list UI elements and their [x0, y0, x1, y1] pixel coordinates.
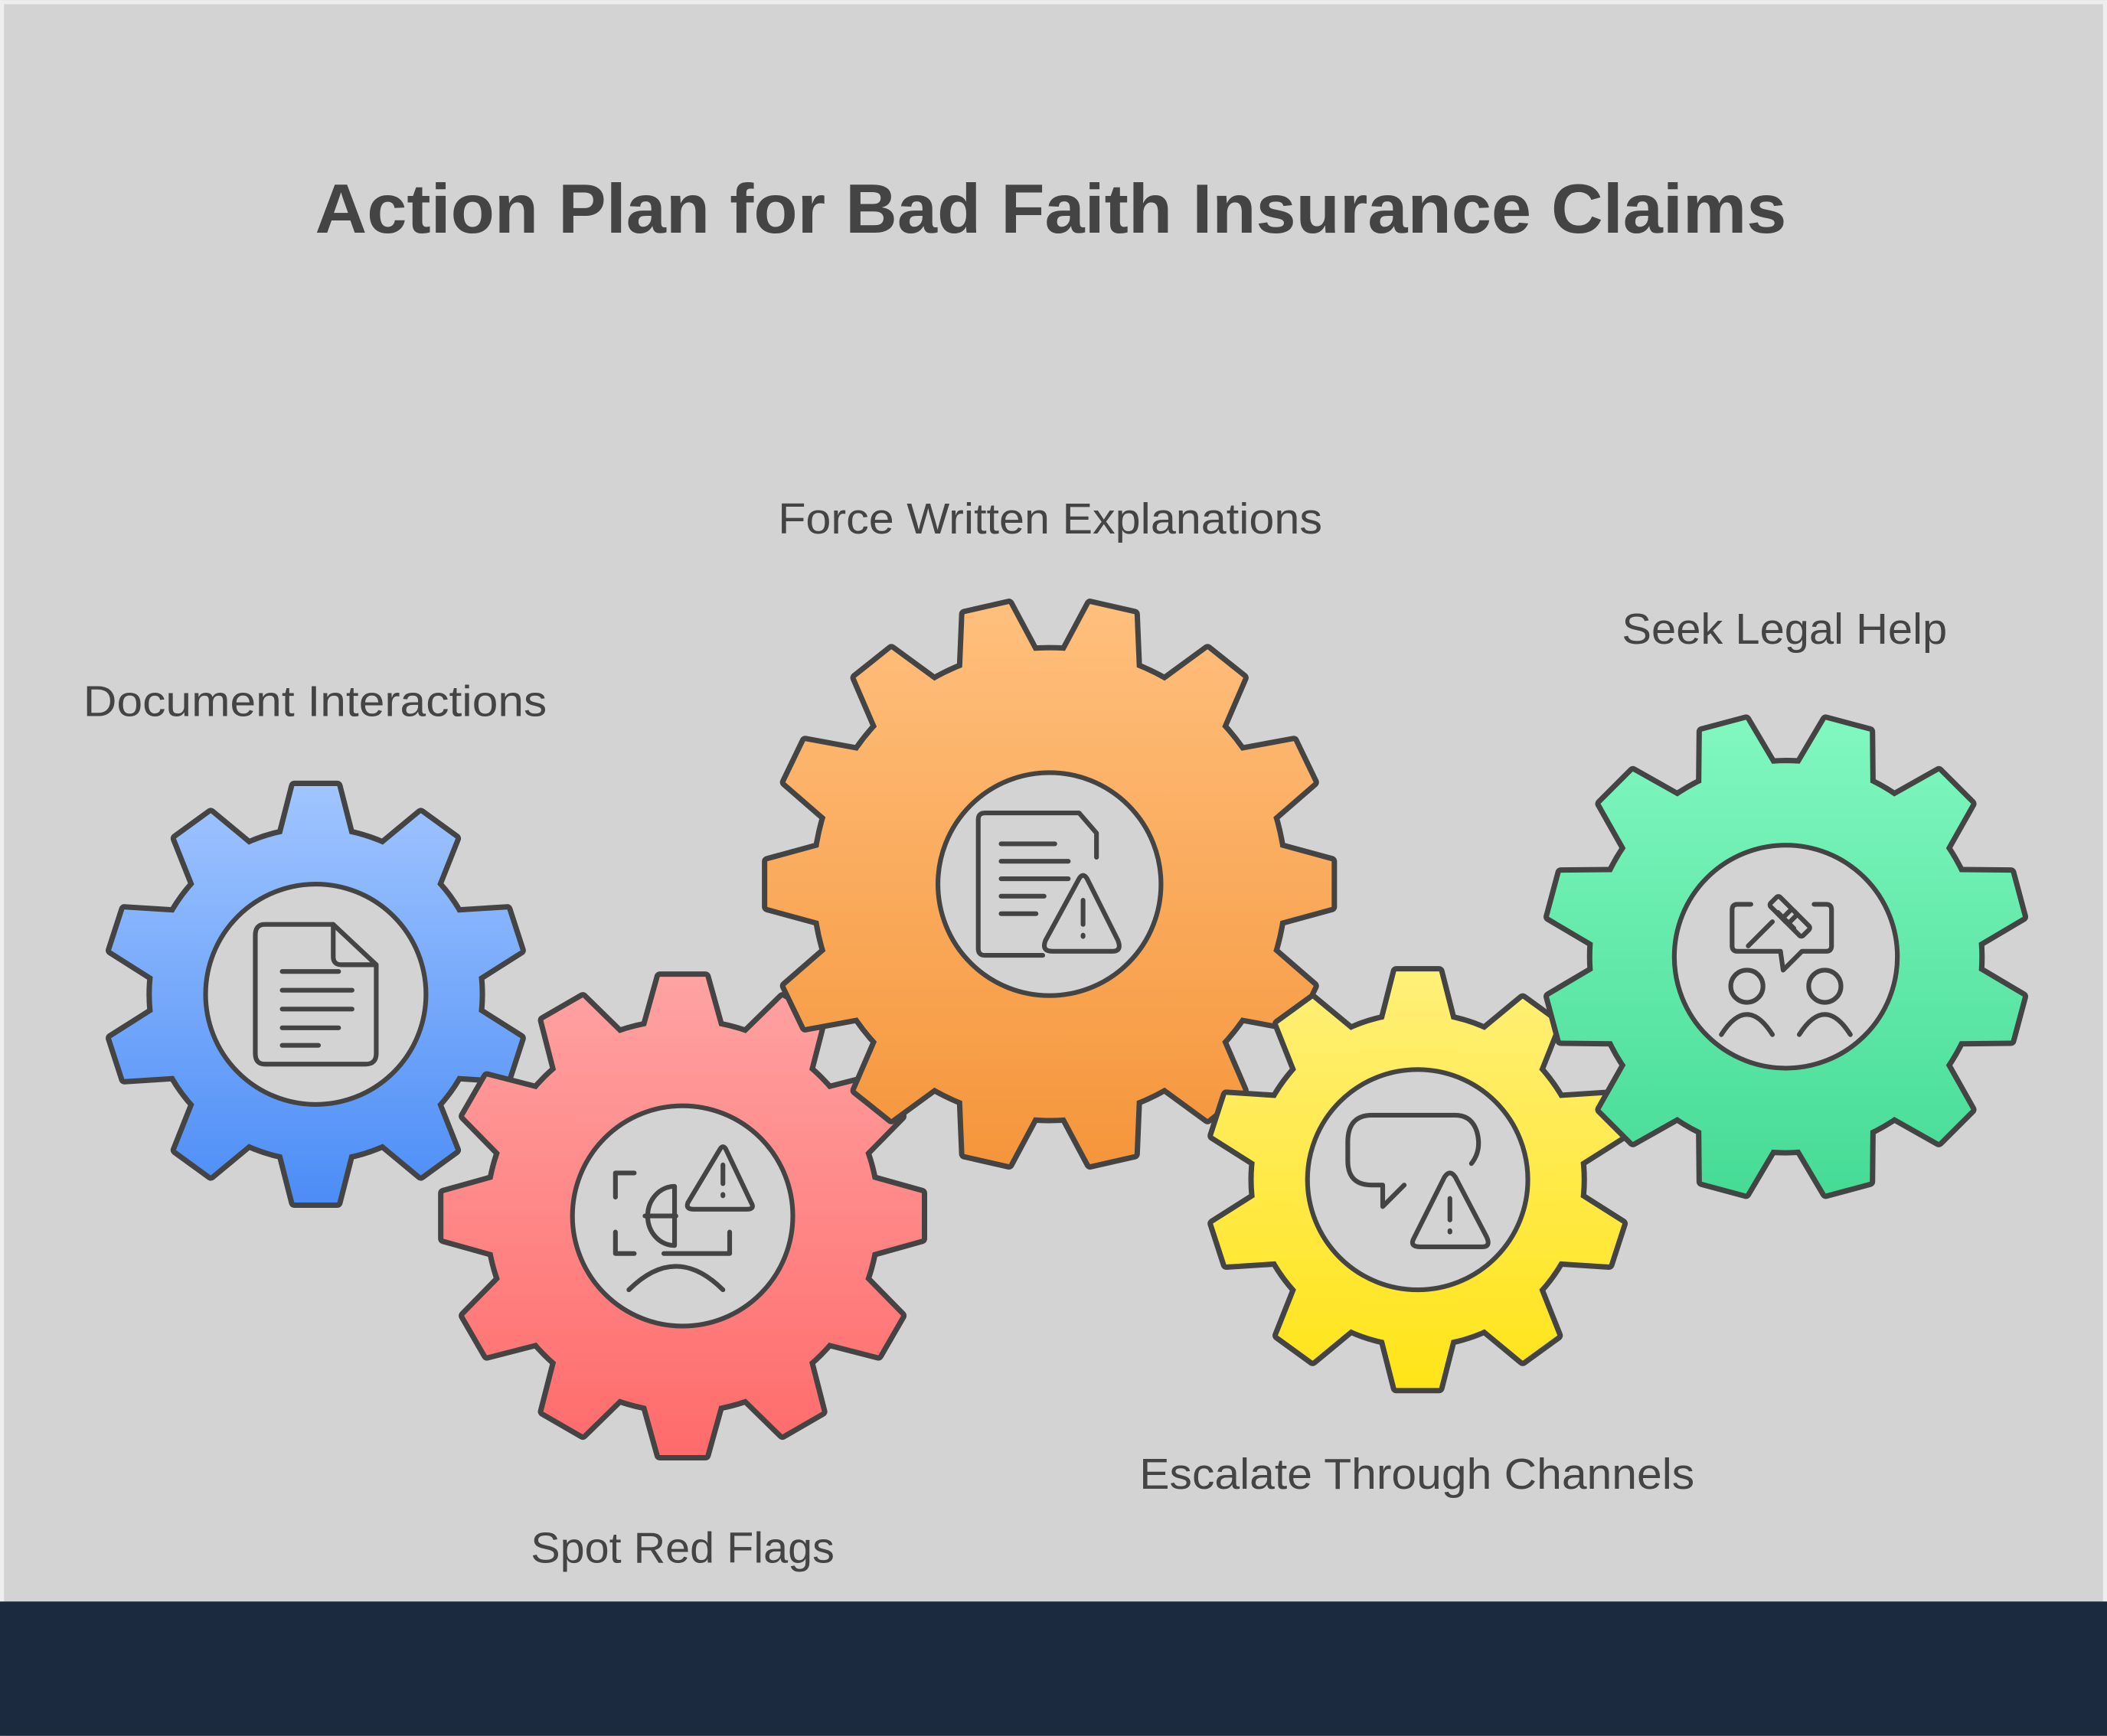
label: spot red flags: Spot Red Flags [531, 1523, 835, 1571]
gear: force written explanations (orange) [762, 599, 1337, 1170]
title: Action Plan for Bad Faith Insurance Claims [315, 170, 1786, 248]
gear: spot red flags (red) [438, 971, 927, 1460]
gear: document interactions (blue) [101, 779, 531, 1209]
footer band [0, 1601, 2107, 1736]
gear: escalate through channels (yellow) [1203, 964, 1632, 1395]
label: force written explanations: Force Written Explanations [778, 494, 1322, 543]
icon: speech bubble with warning [1348, 1115, 1488, 1247]
label: seek legal help: Seek Legal Help [1622, 605, 1947, 653]
gear: seek legal help (green) [1544, 714, 2028, 1199]
icon: red flag face [616, 1147, 753, 1290]
label: document interactions: Document Interactions [83, 677, 547, 726]
label: escalate through channels: Escalate Through Channels [1139, 1450, 1694, 1498]
icon: document with warning [978, 813, 1119, 955]
icon: document [255, 925, 376, 1064]
icon: people with gavel [1721, 896, 1851, 1035]
